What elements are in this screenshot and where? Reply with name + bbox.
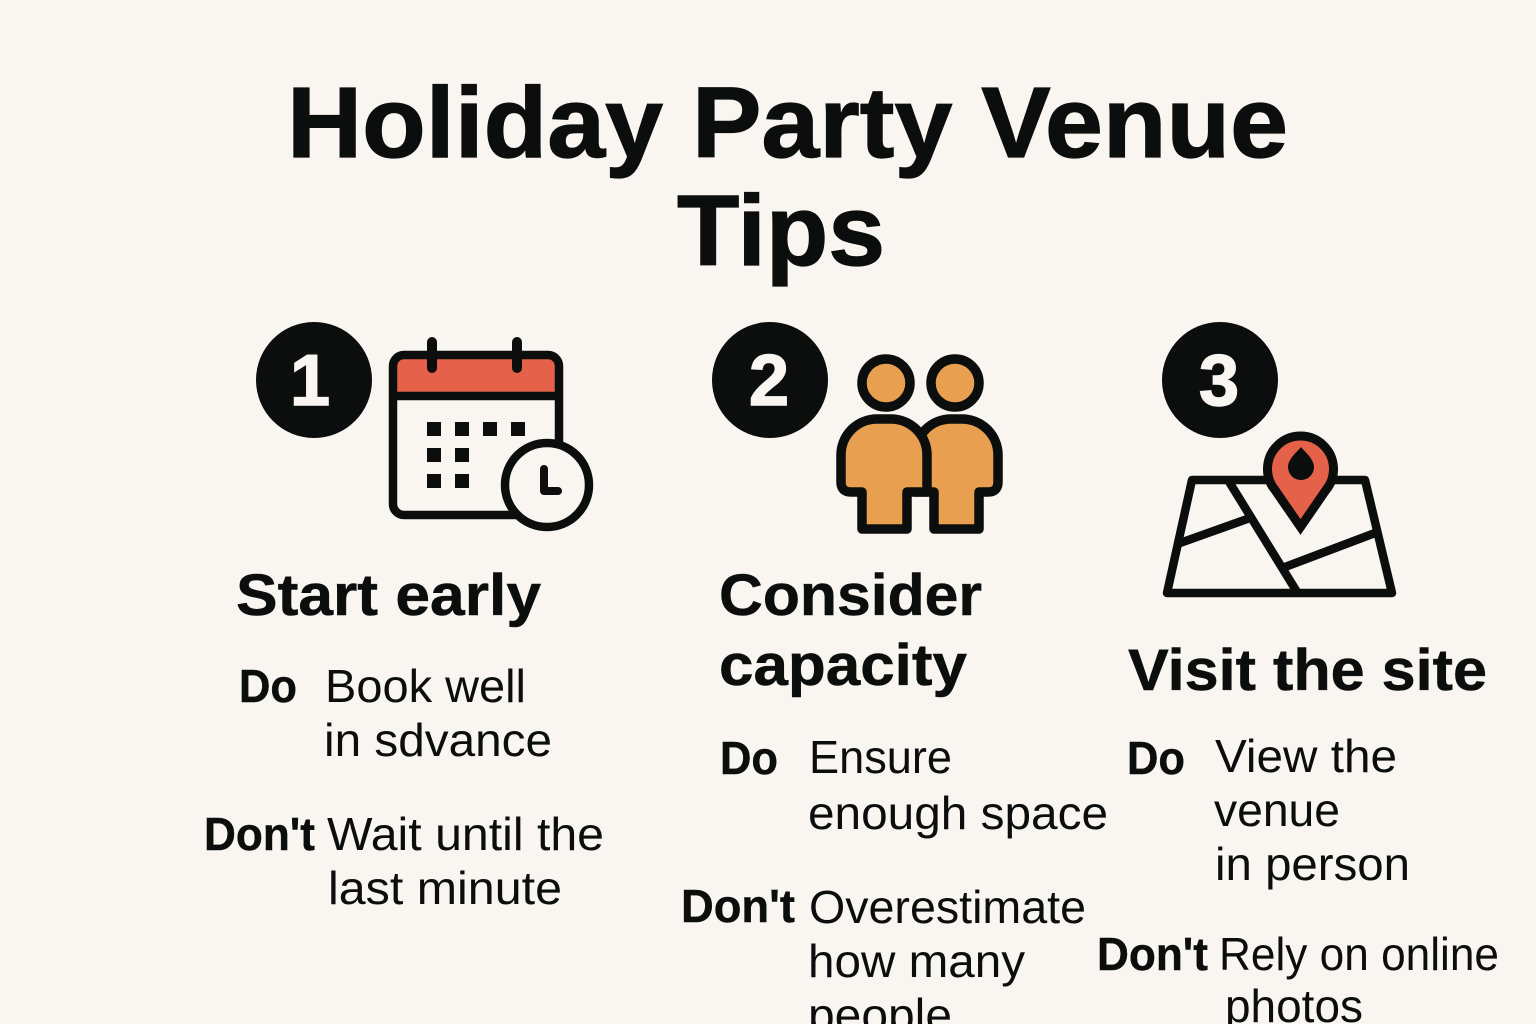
don't tip: Don't [204,808,315,860]
title [287,67,1288,287]
do tip [1127,730,1410,890]
don't tip: Don't [1097,928,1208,980]
icon: map with pin [1167,436,1392,593]
number badge 2 [712,322,828,438]
number badge 3: 3 [1199,341,1239,421]
do tip [239,660,552,766]
don't tip [204,808,604,914]
icon: calendar with clock [393,342,589,527]
heading: start early: Start early [236,563,541,628]
heading: consider capacity: Consider [719,563,982,628]
panel: visit the site [1097,322,1499,1024]
heading: consider capacity [719,563,982,698]
panel: start early [204,322,604,914]
do tip: Do [720,732,778,784]
do tip: Ensure [809,731,952,783]
panel: consider capacity [681,322,1108,1024]
don't tip: Wait until the [327,808,604,860]
icon: two people [841,359,998,529]
number badge 3 [1162,322,1278,438]
number badge 1 [256,322,372,438]
do tip: in sdvance [324,714,552,766]
don't tip [1097,928,1499,1024]
don't tip: Rely on online [1219,928,1499,980]
do tip: in person [1215,838,1410,890]
title: Tips [677,175,885,287]
heading: visit the site: Visit the site [1128,638,1487,703]
do tip: Book well [325,660,526,712]
title: Holiday Party Venue [287,67,1288,179]
don't tip: Don't [681,880,795,932]
don't tip: Overestimate [809,881,1086,933]
do tip: enough space [808,787,1108,839]
do tip [720,731,1108,839]
do tip: venue [1214,784,1340,836]
number badge 2: 2 [749,341,789,421]
number badge 1: 1 [290,341,330,421]
do tip: Do [239,660,297,712]
don't tip [681,880,1086,1024]
don't tip: last minute [328,862,562,914]
do tip: View the [1215,730,1397,782]
heading: consider capacity: capacity [719,633,967,698]
don't tip: how many [808,935,1025,987]
do tip: Do [1127,732,1185,784]
